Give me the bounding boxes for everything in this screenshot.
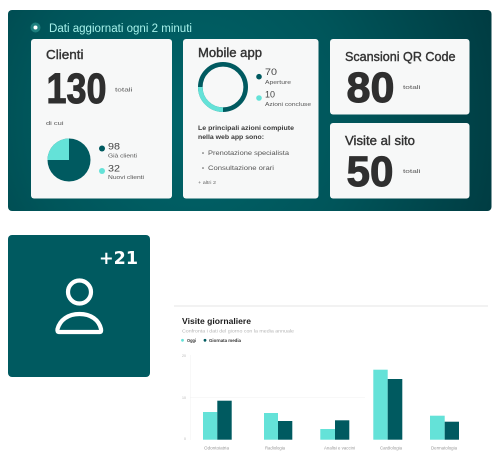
text block: principali azioni	[198, 125, 295, 141]
panel: dashboard	[8, 10, 492, 211]
label: totali: totali	[403, 85, 420, 91]
panel: visite giornaliere chart	[174, 306, 488, 452]
legend: nuovi clienti	[99, 164, 144, 181]
bars: analisi e vaccini	[320, 420, 349, 440]
bars: radiologia	[264, 413, 292, 440]
legend: già clienti: Già clienti	[108, 154, 137, 160]
label: di cui: di cui	[46, 121, 64, 127]
panel: visite al sito	[330, 123, 470, 198]
text block: principali azioni: Le principali azioni compiute	[198, 125, 295, 132]
category labels: Dermatologia	[431, 446, 457, 452]
icon: live status dot	[30, 22, 40, 32]
label: altri 2: + altri 2	[198, 180, 217, 185]
label: totali: totali	[115, 88, 132, 94]
legend: già clienti	[99, 142, 137, 160]
heading: update frequency: Dati aggiornati ogni 2 minuti	[49, 23, 192, 35]
legend: già clienti: 98	[108, 142, 120, 152]
category labels: Cardiologia	[380, 446, 402, 452]
number: +21: +21	[99, 248, 138, 269]
legend: azioni concluse	[256, 90, 311, 108]
number: 50: 50	[346, 148, 394, 196]
category labels	[204, 446, 457, 452]
bars: cardiologia	[373, 370, 402, 440]
legend: azioni concluse: 10	[265, 90, 275, 100]
category labels: Analisi e vaccini	[324, 446, 355, 452]
icon: user	[57, 280, 101, 332]
bars: odontoiatria	[203, 401, 232, 440]
legend: azioni concluse: Azioni concluse	[265, 102, 311, 108]
legend: Oggi	[187, 338, 196, 343]
chart axes: 10	[182, 396, 186, 400]
number: 130 totali: 130	[46, 65, 106, 113]
subtitle: Confronta i dati del giorno con la media annuale	[182, 328, 294, 334]
legend: aperture: 70	[265, 67, 277, 78]
pie chart: clienti	[48, 138, 90, 182]
panel: user count tile	[8, 235, 150, 377]
heading: mobile app: Mobile app	[198, 45, 262, 60]
panel: mobile app	[183, 39, 318, 198]
legend: aperture: Aperture	[265, 80, 291, 86]
panel: scansioni qr code	[330, 39, 470, 114]
label: totali: totali	[403, 169, 420, 175]
donut chart: mobile app	[200, 64, 246, 110]
number: 80: 80	[346, 64, 394, 112]
text block: principali azioni: nella web app sono:	[198, 134, 264, 141]
legend: nuovi clienti: Nuovi clienti	[108, 175, 144, 181]
heading: clienti: Clienti	[46, 47, 84, 62]
panel: clienti	[31, 39, 172, 198]
legend: nuovi clienti: 32	[108, 164, 120, 174]
legend: aperture	[256, 67, 291, 86]
category labels: Odontoiatria	[204, 446, 229, 452]
chart axes: 0	[184, 437, 186, 441]
bars: dermatologia	[430, 416, 459, 440]
heading: visite al sito: Visite al sito	[345, 133, 415, 148]
chart axes	[182, 354, 365, 441]
category labels: Radiologia	[265, 446, 285, 452]
list: azioni: Prenotazione specialista	[208, 150, 290, 157]
legend: Giornata media	[209, 338, 242, 343]
list: azioni: Consultazione orari	[208, 165, 274, 172]
legend	[181, 338, 242, 343]
heading: visite giornaliere: Visite giornaliere	[182, 316, 251, 326]
heading: scansioni qr code: Scansioni QR Code	[345, 49, 456, 64]
list: azioni	[202, 150, 290, 172]
chart axes: 20	[182, 354, 186, 358]
